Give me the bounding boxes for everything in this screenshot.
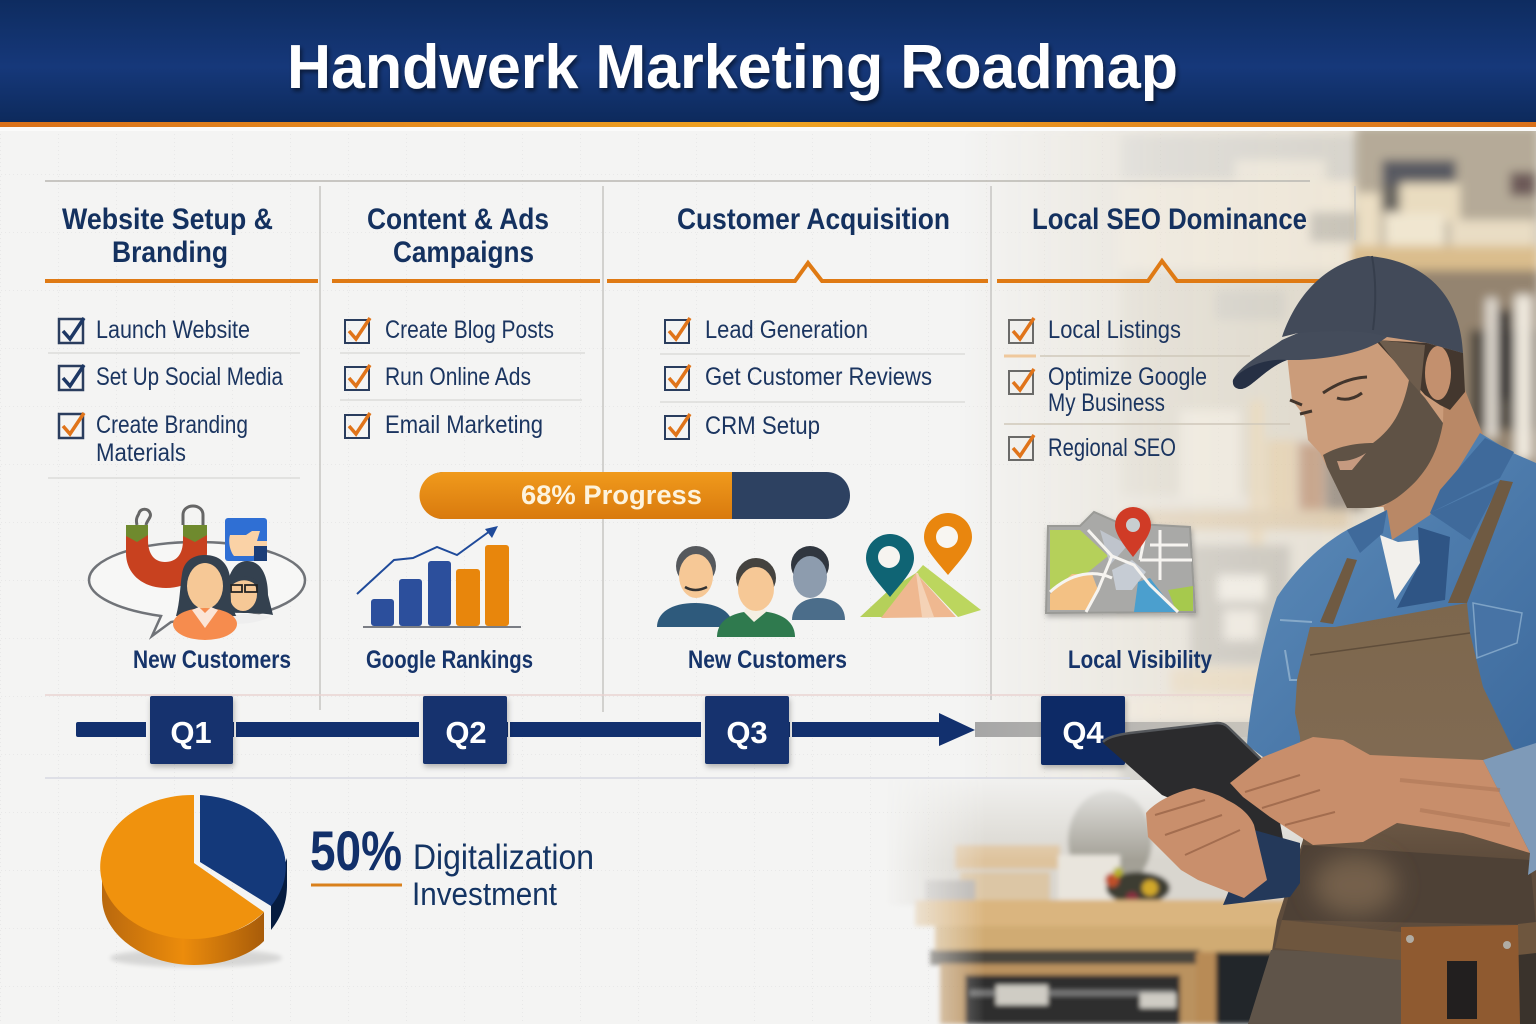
- heading: [62, 203, 273, 269]
- checklist: CRM Setup: [705, 412, 820, 440]
- panel: Q2 content and ads campaigns: [332, 203, 600, 674]
- header banner: [0, 0, 1536, 131]
- icon label: New Customers: [688, 646, 847, 674]
- eyes and brows: [1290, 377, 1367, 414]
- bib seam: [1310, 633, 1470, 655]
- icon: rising bar chart: [357, 526, 521, 627]
- progress bar: 68% progress: [419, 472, 850, 519]
- neck: [1383, 390, 1487, 540]
- icon: magnet attracting customers: [89, 506, 305, 640]
- heading: Branding: [112, 236, 228, 269]
- apron highlight: [1313, 855, 1397, 915]
- collar and placket: [1347, 438, 1514, 553]
- heading: Customer Acquisition: [677, 203, 950, 236]
- apron straps: [1320, 480, 1513, 624]
- heading: Website Setup &: [62, 203, 273, 236]
- denim shirt: [1247, 433, 1536, 775]
- quarter marker Q4: [1041, 696, 1125, 765]
- cap seams: [1372, 256, 1375, 330]
- checklist: [340, 316, 585, 439]
- underline with peak: [607, 263, 988, 281]
- hair behind ear: [1375, 340, 1465, 410]
- quarter marker Q1: [150, 696, 233, 764]
- underline with peak: [997, 261, 1320, 281]
- checklist: Regional SEO: [1048, 434, 1176, 462]
- frame lines: [45, 181, 1355, 778]
- stat: 50% digitalization investment: 50%: [310, 819, 402, 882]
- checklist: [660, 316, 965, 440]
- checklist: Create Branding: [96, 411, 248, 439]
- apron belt: [1275, 920, 1536, 960]
- chest pocket: [1473, 603, 1522, 658]
- apron shading: [1282, 845, 1536, 925]
- checklist: Materials: [96, 439, 186, 467]
- quarter marker Q4: Q4: [1062, 715, 1104, 750]
- craftsman holding tablet: [1103, 256, 1536, 1024]
- right hand and forearm: [1230, 737, 1530, 853]
- cap crown: [1282, 256, 1463, 353]
- underline: [332, 279, 600, 283]
- panel: Q1 website setup and branding: [45, 203, 318, 674]
- checklist: Local Listings: [1048, 316, 1181, 344]
- sleeve seam: [1280, 620, 1312, 680]
- heading: Campaigns: [393, 236, 534, 269]
- finger lines: [1155, 775, 1335, 855]
- sideburn: [1378, 340, 1425, 395]
- stat: 50% digitalization investment: Digitalization: [413, 838, 594, 877]
- icon: customers group: [657, 546, 845, 637]
- checklist: Optimize Google: [1048, 363, 1207, 391]
- face: [1287, 335, 1445, 507]
- checklist: Create Blog Posts: [385, 316, 554, 344]
- stat: 50% digitalization investment: [310, 819, 594, 912]
- heading: Content & Ads: [367, 203, 549, 236]
- lower lip: [1337, 453, 1366, 470]
- timeline arrow: [76, 696, 1265, 765]
- apron lower skirt: [1248, 950, 1401, 1024]
- heading: Local SEO Dominance: [1032, 203, 1307, 236]
- beard: [1323, 380, 1443, 508]
- apron: [1248, 603, 1536, 1024]
- workshop backdrop: upper shelves: [1034, 131, 1536, 780]
- checklist: Launch Website: [96, 316, 250, 344]
- checklist: [1004, 316, 1290, 462]
- tool pouch: [1401, 925, 1520, 1024]
- quarter marker Q2: Q2: [445, 715, 487, 750]
- checklist: Get Customer Reviews: [705, 363, 932, 391]
- icon label: Google Rankings: [366, 646, 533, 674]
- heading: [367, 203, 549, 269]
- tablet: [1103, 723, 1285, 850]
- left hand: [1146, 788, 1267, 898]
- forearm shading: [1400, 780, 1510, 825]
- checklist: [48, 316, 300, 478]
- panel: Q4 local SEO dominance: [997, 203, 1320, 674]
- right sleeve: [1483, 743, 1536, 875]
- quarter marker Q3: Q3: [726, 715, 768, 750]
- underline: [45, 279, 318, 283]
- checklist: Email Marketing: [385, 411, 543, 439]
- panel: Q3 customer acquisition: [607, 203, 988, 674]
- quarter marker Q2: [423, 696, 507, 764]
- checklist: Run Online Ads: [385, 363, 531, 391]
- cap brim: [1233, 331, 1387, 389]
- title: Handwerk Marketing Roadmap: [287, 33, 1178, 102]
- icon label: New Customers: [133, 646, 291, 674]
- quarter marker Q3: [705, 696, 789, 764]
- quarter marker Q1: Q1: [170, 715, 212, 750]
- checklist: My Business: [1048, 389, 1165, 417]
- icon: map pins on terrain: [860, 513, 981, 618]
- progress bar: 68% progress: 68% Progress: [521, 480, 702, 510]
- t-shirt: [1380, 535, 1420, 600]
- pie chart: digitalization investment: [100, 795, 287, 967]
- icon label: Local Visibility: [1068, 646, 1212, 674]
- icon: local map with pin: [1046, 507, 1195, 613]
- workshop backdrop: counter and cabinet: [906, 780, 1303, 1024]
- ear: [1425, 346, 1451, 400]
- checklist: Set Up Social Media: [96, 363, 283, 391]
- left sleeve cuff: [1223, 830, 1300, 905]
- stat: 50% digitalization investment: Investment: [412, 876, 557, 912]
- checklist: Lead Generation: [705, 316, 868, 344]
